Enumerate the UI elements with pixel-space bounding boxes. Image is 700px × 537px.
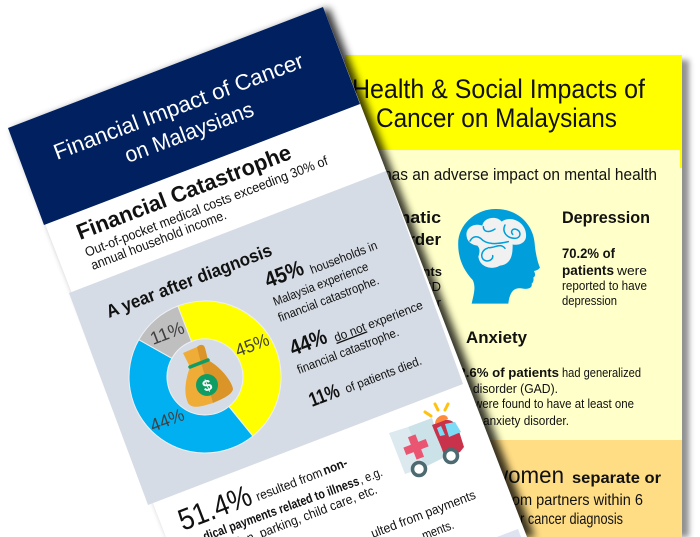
heading: health and social impacts — [352, 74, 645, 133]
callout: women separate from partners — [491, 462, 661, 528]
text block: post-traumatic stress disorder: 21.7% of patients — [336, 264, 442, 279]
text block: anxiety: anxiety disorder. — [483, 413, 569, 428]
text block: post-traumatic stress disorder: Stress Disorder — [316, 231, 442, 249]
stat: 45 percent: households in — [308, 238, 379, 277]
stat: 11 percent: 11% — [306, 380, 343, 412]
chart: donut: 44% — [147, 405, 187, 436]
stat: 51.4 percent non-medical payments: , e.g. — [357, 464, 384, 487]
text block: definition: Out-of-pocket medical costs exceeding 30% of — [83, 153, 330, 260]
text block: anxiety: Anxiety — [466, 329, 528, 347]
stat: 11 percent: of patients died. — [343, 354, 424, 396]
heading: health and social impacts: Health & Social Impacts of — [352, 74, 645, 104]
stat: 45 percent: 45% — [261, 255, 307, 293]
title banner: financial impact: on Malaysians — [121, 96, 257, 168]
panel: health and social impacts page — [316, 55, 689, 537]
panel: financial impact page — [8, 7, 535, 537]
stat: 11 percent — [306, 354, 424, 412]
icon: head with brain — [458, 209, 540, 304]
stat: 44 percent: 44% — [286, 324, 330, 361]
stat: 45 percent: financial catastrophe. — [276, 273, 381, 325]
title banner: financial impact: Financial Impact of Cancer — [50, 48, 307, 165]
text block: post-traumatic stress disorder — [316, 209, 442, 310]
chart: donut — [129, 301, 281, 453]
text block: anxiety — [431, 329, 641, 428]
text block: depression: 70.2% of — [562, 246, 615, 261]
stat: 51.4 percent non-medical payments: resulted from — [254, 465, 324, 504]
text block: depression — [562, 209, 650, 308]
icon: money bag: $ — [200, 377, 215, 396]
text block: post-traumatic stress disorder: after — [415, 295, 442, 310]
heading: a year after diagnosis: A year after diagnosis — [103, 240, 275, 322]
text block: anxiety: were found to have at least one — [473, 396, 634, 411]
icon: ambulance — [389, 404, 464, 476]
text block: post-traumatic stress disorder: Post-traumatic — [316, 209, 441, 227]
callout: women separate from partners: from partners within 6 — [503, 492, 643, 509]
text block: depression: Depression — [562, 209, 650, 227]
text block: post-traumatic stress disorder: had PTSD — [381, 279, 441, 294]
stat: 45 percent: Malaysia experience — [271, 260, 370, 309]
subheading: mental health: Cancer has an adverse impact on mental health — [329, 165, 657, 184]
title banner: financial impact — [8, 7, 360, 225]
heading: financial catastrophe: Financial Catastrophe — [73, 140, 295, 245]
text block: depression: patients — [562, 263, 614, 278]
panel: a year after diagnosis — [69, 171, 463, 505]
stat: 44 percent: financial catastrophe. — [295, 325, 401, 377]
stat: 51.4 percent non-medical payments: non- — [321, 455, 349, 478]
icon: money bag — [183, 345, 233, 407]
text block: depression: depression — [562, 293, 617, 308]
text block: definition: annual household income. — [89, 207, 229, 273]
stat: 45 percent — [261, 238, 381, 325]
callout: women separate from partners: women — [491, 462, 564, 488]
text block: anxiety: anxiety disorder (GAD). — [431, 381, 558, 396]
text block: anxiety: had generalized — [562, 365, 641, 380]
text block: anxiety: 32.6% of patients — [451, 365, 559, 380]
heading: health and social impacts: Cancer on Malaysians — [376, 103, 617, 133]
chart: donut: 11% — [147, 318, 187, 349]
stat: 44 percent: do not experience — [332, 298, 425, 345]
stat: 44 percent — [286, 298, 425, 377]
callout: women separate from partners: after cancer diagnosis — [499, 511, 623, 528]
text block: depression: reported to have — [562, 278, 647, 293]
text block: depression: were — [616, 263, 647, 278]
chart: donut: 45% — [232, 330, 272, 361]
callout: women separate from partners: separate or — [572, 470, 661, 487]
stat: 51.4 percent non-medical payments: 51.4% — [174, 479, 256, 537]
